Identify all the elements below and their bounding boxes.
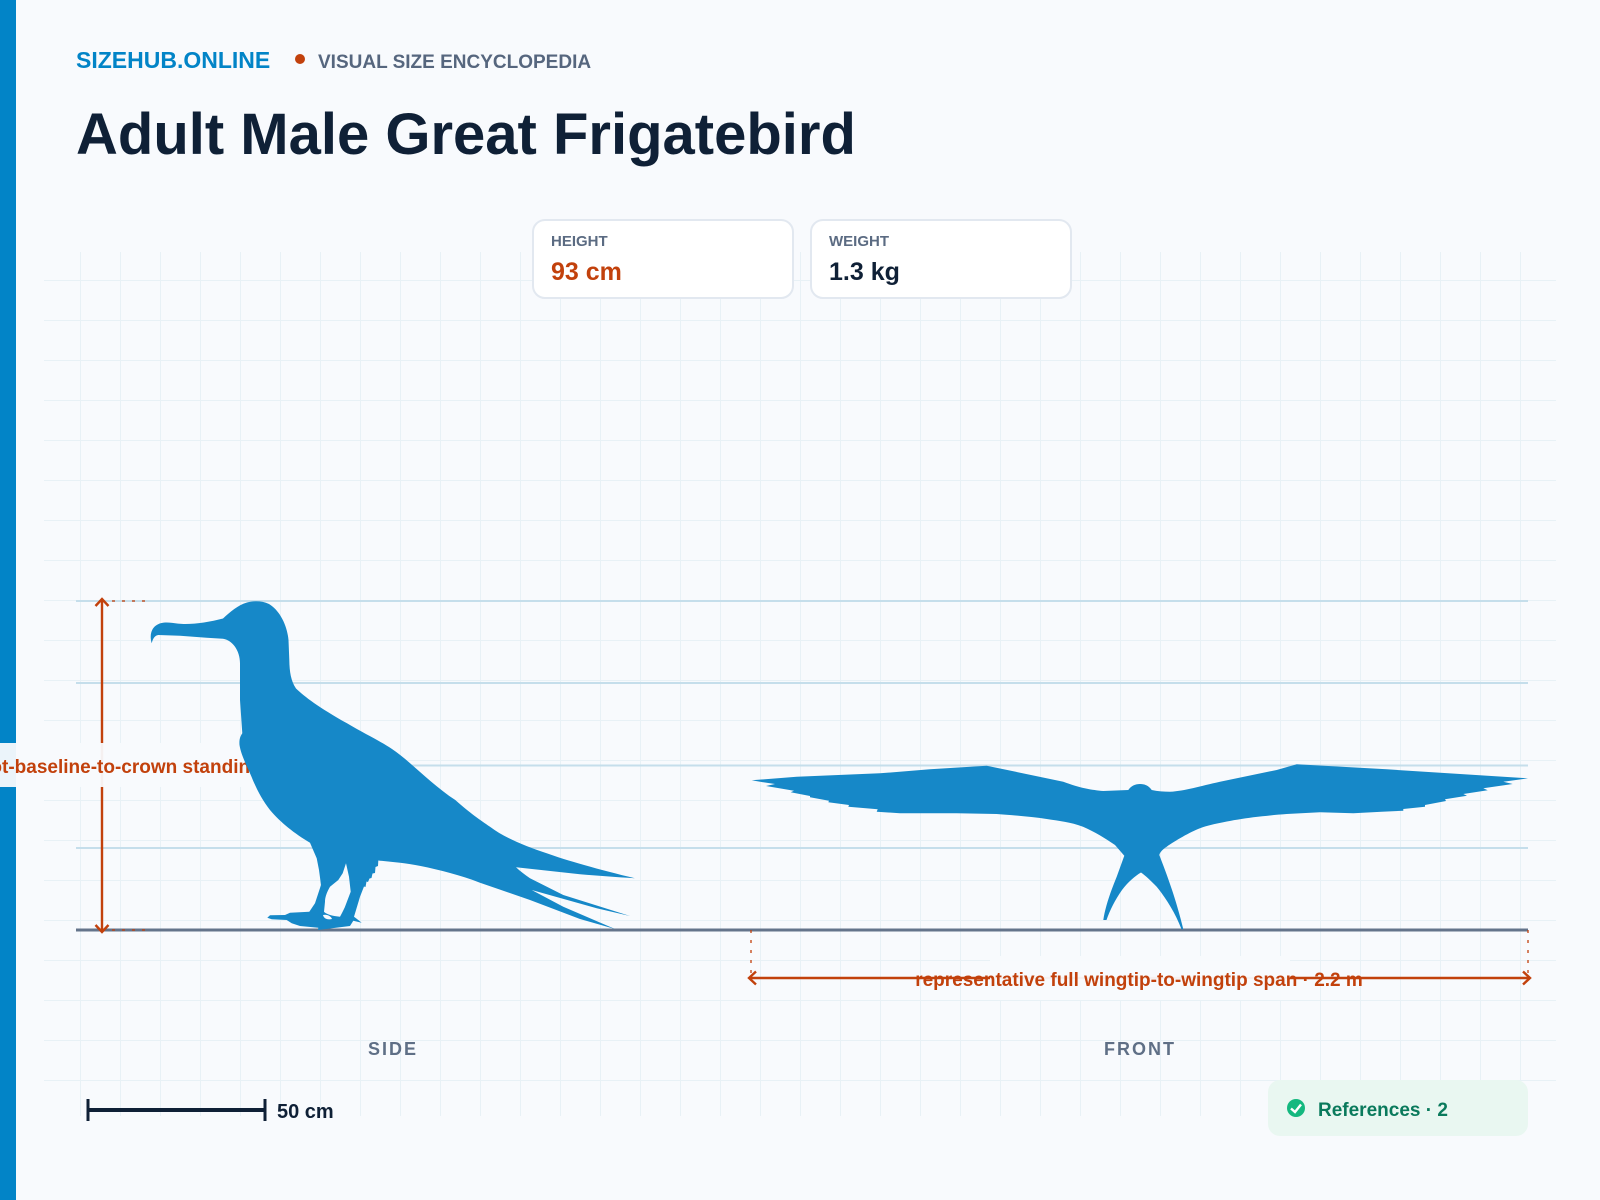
scale bar	[88, 1099, 334, 1123]
stat card: weight	[811, 220, 1071, 298]
header brand line	[76, 47, 591, 73]
height label	[0, 743, 395, 787]
view label: side: SIDE	[368, 1039, 418, 1059]
references badge: References · 2	[1318, 1100, 1448, 1121]
stat card: height: HEIGHT	[551, 233, 608, 250]
wingspan dimension arrow	[749, 930, 1530, 984]
ground baseline	[76, 928, 1528, 932]
height dimension arrow	[96, 599, 146, 932]
header brand line: SIZEHUB.ONLINE	[76, 47, 270, 73]
references badge	[1268, 1080, 1528, 1136]
stat card: weight: 1.3 kg	[829, 258, 900, 286]
stat card: height	[533, 220, 793, 298]
scale bar: 50 cm	[277, 1101, 334, 1123]
view label: front: FRONT	[1104, 1039, 1176, 1059]
icon: check circle	[1287, 1099, 1305, 1117]
silhouette: side view bird	[151, 601, 635, 930]
left accent bar	[0, 0, 16, 1200]
wingspan label: representative full wingtip-to-wingtip span · 2.2 m	[915, 970, 1363, 991]
wingspan label	[915, 956, 1363, 1000]
stat card: height: 93 cm	[551, 258, 622, 286]
header brand line: VISUAL SIZE ENCYCLOPEDIA	[318, 52, 591, 73]
stat card: weight: WEIGHT	[829, 233, 889, 250]
title: Adult Male Great Frigatebird	[76, 102, 856, 167]
silhouette: front view bird	[752, 764, 1528, 929]
